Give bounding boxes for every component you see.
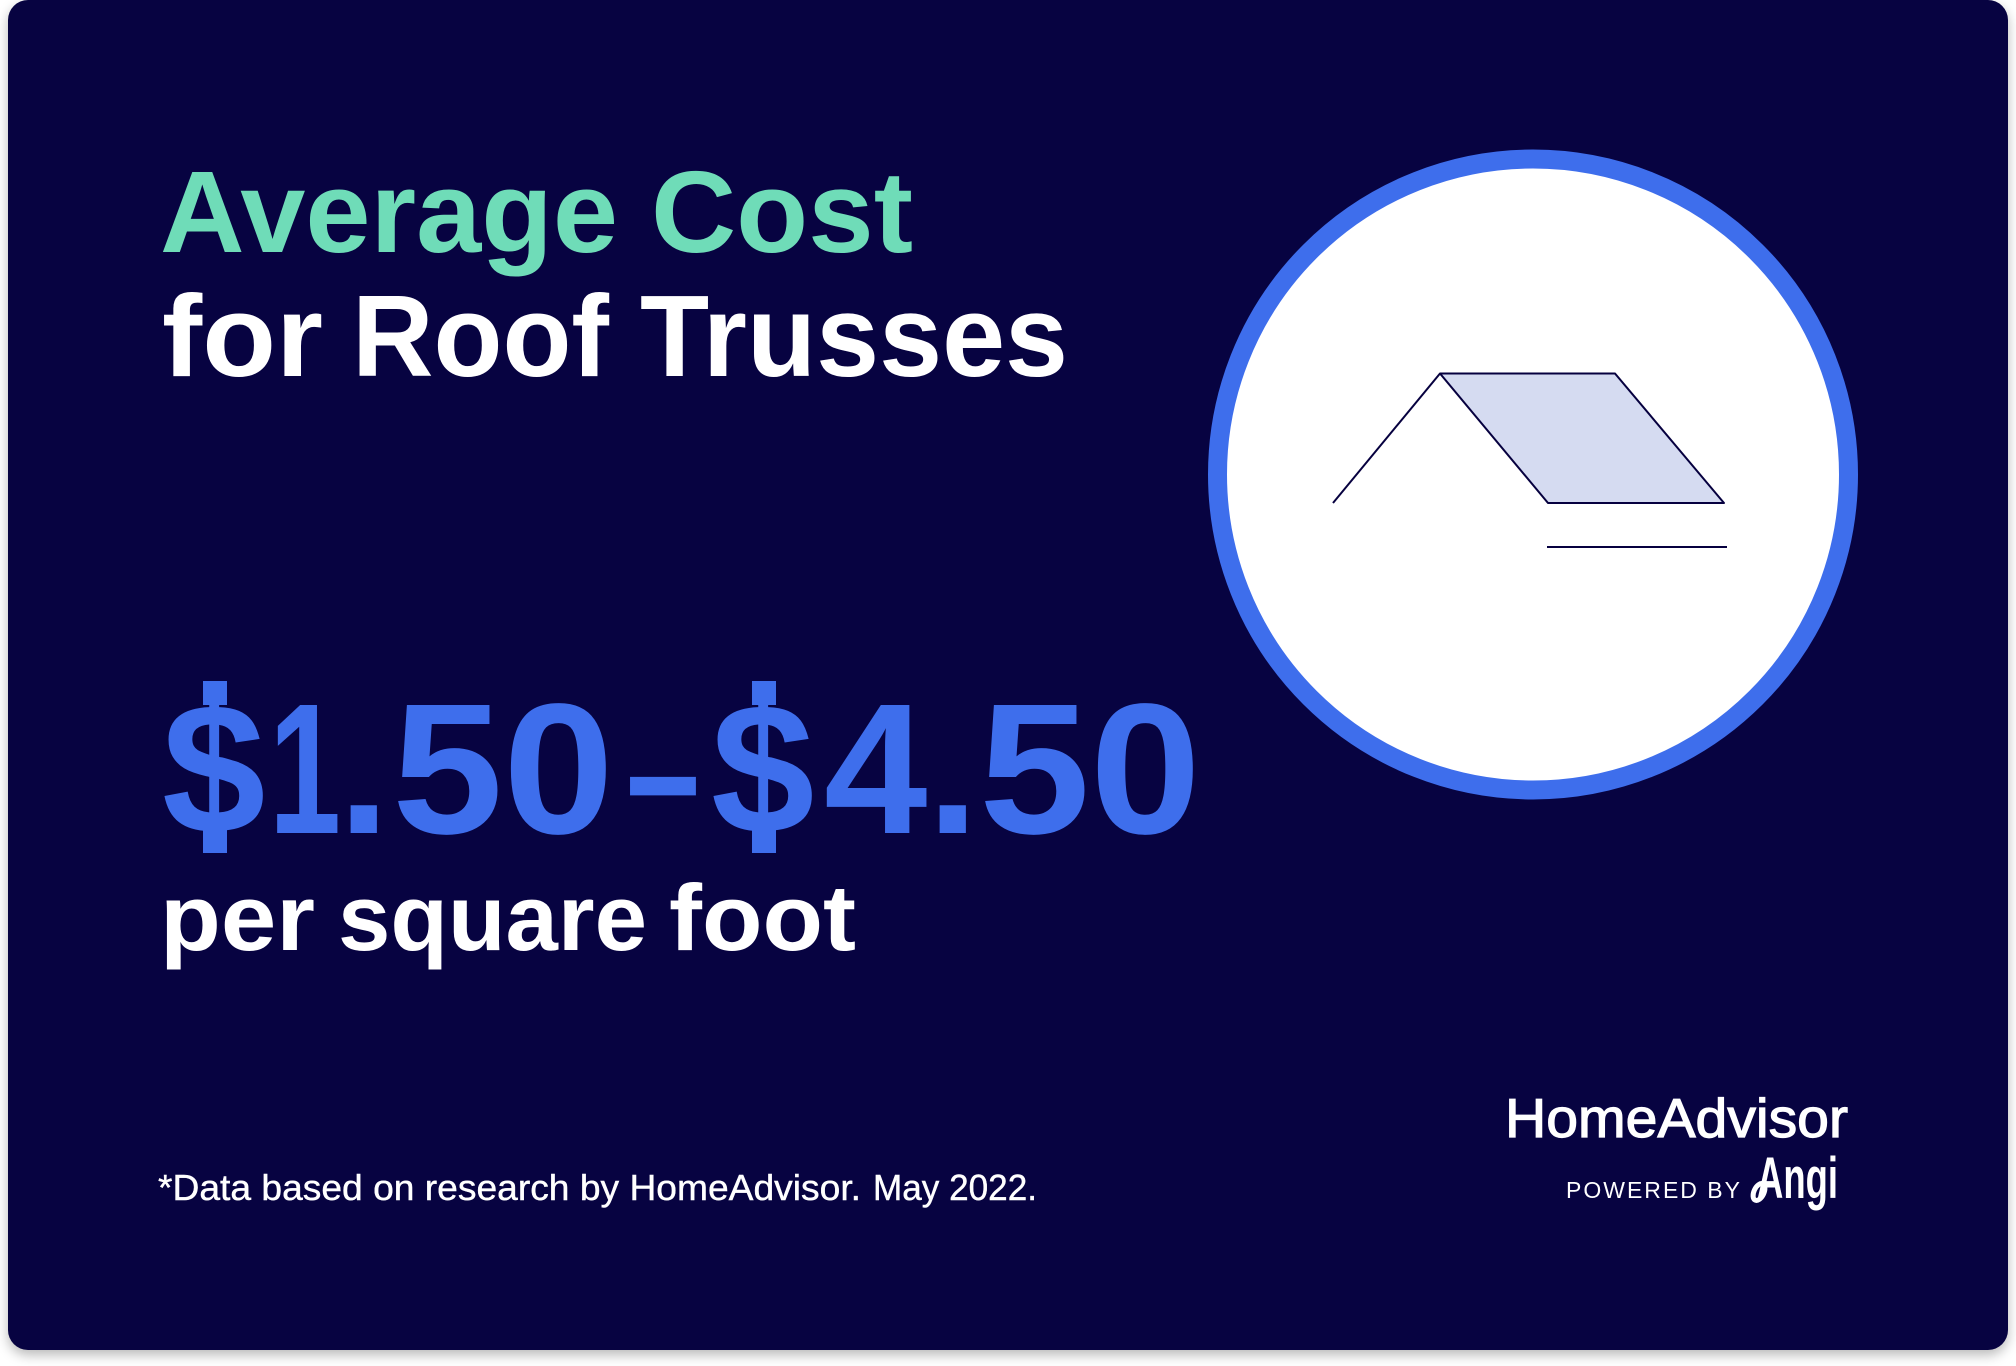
title line 1 xyxy=(160,147,913,277)
price range: . xyxy=(927,666,979,873)
footnote: May 2022. xyxy=(873,1167,1037,1208)
price unit: foot xyxy=(669,865,856,970)
roof left slope xyxy=(1333,374,1440,503)
price range: 50 xyxy=(979,666,1201,873)
icon: roof in circle xyxy=(1218,159,1848,790)
price unit: per xyxy=(160,865,315,970)
title line 1: Cost xyxy=(651,147,913,277)
roof shaded panel xyxy=(1440,374,1724,503)
title xyxy=(160,147,1068,401)
title line 2: Trusses xyxy=(640,271,1068,401)
price range: $ xyxy=(162,666,265,873)
price range: – xyxy=(626,669,700,876)
title line 2: Roof xyxy=(352,271,609,401)
price range xyxy=(162,666,1201,876)
footnote: *Data based on research by HomeAdvisor. xyxy=(158,1167,861,1208)
price unit: square xyxy=(338,865,647,970)
Angi wordmark: Angi xyxy=(1757,1146,1838,1211)
price unit xyxy=(160,865,856,970)
price range: 4 xyxy=(824,666,927,873)
title line 2 xyxy=(162,271,1068,401)
title line 1: Average xyxy=(160,147,618,277)
price range: . xyxy=(338,666,390,873)
title line 2: for xyxy=(162,271,323,401)
ground line xyxy=(1547,546,1727,548)
logo: HomeAdvisor powered by Angi xyxy=(1505,1087,1848,1211)
Angi loop mark xyxy=(1751,1182,1767,1202)
circle badge xyxy=(1218,159,1848,790)
logo wordmark: HomeAdvisor xyxy=(1505,1087,1848,1149)
price range: 50 xyxy=(392,666,614,873)
price range: $ xyxy=(711,666,814,873)
powered by label: POWERED BY xyxy=(1566,1177,1740,1203)
price range: 1 xyxy=(269,666,341,873)
